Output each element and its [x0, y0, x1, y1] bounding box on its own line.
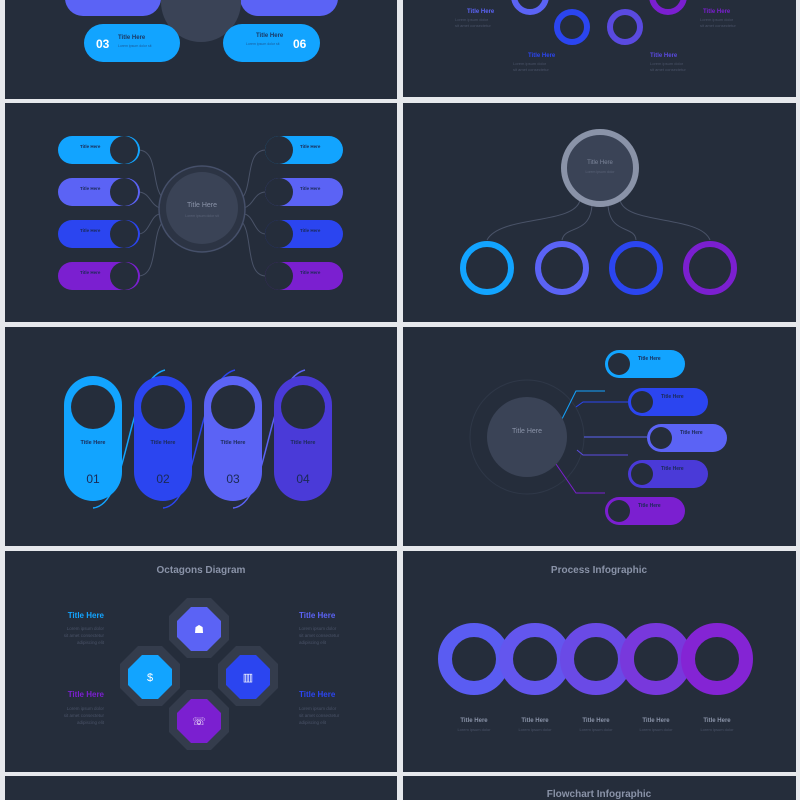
- panel: top-right circles: Lorem ipsum dolor: [513, 61, 547, 66]
- panel: numbered pills: 01: [86, 472, 100, 486]
- panel: process infographic: Title Here: [521, 718, 549, 724]
- panel: mind map pills: Title Here: [300, 144, 321, 149]
- panel: top-left hexa pills: [5, 0, 397, 99]
- panel: octagons diagram: ☏: [192, 716, 206, 728]
- panel: mind map pills: Title Here: [80, 186, 101, 191]
- panel: mind map pills: Title Here: [80, 144, 101, 149]
- panel: process infographic: Lorem ipsum dolor: [518, 727, 552, 732]
- panel: top-right circles: Title Here: [703, 9, 731, 15]
- panel: top-right circles: sit amet consectetur: [455, 23, 491, 28]
- panel: octagons diagram: Lorem ipsum dolor: [67, 706, 105, 711]
- panel: bottom-left: [5, 776, 397, 800]
- panel: process infographic: Lorem ipsum dolor: [639, 727, 673, 732]
- panel: octagons diagram: sit amet consectetur: [64, 713, 104, 718]
- panel: top-right circles: Lorem ipsum dolor: [700, 17, 734, 22]
- pill 03: Lorem ipsum dolor sit: [118, 44, 151, 48]
- panel: hierarchy circles: [403, 103, 796, 322]
- panel: numbered pills: Title Here: [151, 440, 175, 446]
- panel: process infographic: Lorem ipsum dolor: [700, 727, 734, 732]
- panel: octagons diagram: ☗: [194, 624, 204, 636]
- panel: top-right circles: Lorem ipsum dolor: [455, 17, 489, 22]
- panel: octagons diagram: $: [147, 672, 153, 684]
- panel: radial pills: Title Here: [638, 356, 661, 362]
- pill 05: [240, 0, 338, 16]
- panel: numbered pills: 03: [226, 472, 240, 486]
- panel: process infographic: Title Here: [582, 718, 610, 724]
- panel: octagons diagram: Lorem ipsum dolor: [299, 626, 337, 631]
- panel: flowchart infographic: Flowchart Infographic: [547, 789, 652, 800]
- panel: numbered pills: 04: [296, 472, 310, 486]
- center circle: Lorem ipsum dolor sit: [185, 214, 219, 218]
- panel: radial pills: Title Here: [661, 466, 684, 472]
- panel: top-right circles: Title Here: [650, 53, 678, 59]
- panel: octagons diagram: adipiscing elit: [299, 640, 327, 645]
- pill 06: [223, 24, 320, 62]
- panel: octagons diagram: Title Here: [68, 611, 105, 620]
- panel: octagons diagram: Title Here: [299, 611, 336, 620]
- panel: octagons diagram: Lorem ipsum dolor: [67, 626, 105, 631]
- panel: top-right circles: sit amet consectetur: [650, 67, 686, 72]
- panel: mind map pills: Title Here: [300, 186, 321, 191]
- panel: octagons diagram: ▥: [243, 672, 253, 684]
- pill 03: Title Here: [118, 35, 146, 41]
- pill 03: 03: [96, 37, 110, 51]
- panel: octagons diagram: Title Here: [299, 690, 336, 699]
- panel: octagons diagram: adipiscing elit: [299, 720, 327, 725]
- panel: process infographic: Title Here: [703, 718, 731, 724]
- panel: octagons diagram: adipiscing elit: [77, 720, 105, 725]
- panel: octagons diagram: [5, 551, 397, 772]
- pill 06: Lorem ipsum dolor sit: [246, 42, 279, 46]
- panel: mind map pills: Title Here: [80, 228, 101, 233]
- panel: flowchart infographic: [403, 776, 796, 800]
- panel: octagons diagram: adipiscing elit: [77, 640, 105, 645]
- panel: mind map pills: Title Here: [300, 228, 321, 233]
- panel: numbered pills: 02: [156, 472, 170, 486]
- panel: octagons diagram: sit amet consectetur: [299, 713, 340, 718]
- panel: process infographic: Lorem ipsum dolor: [579, 727, 613, 732]
- panel: radial pills: Title Here: [661, 394, 684, 400]
- panel: octagons diagram: sit amet consectetur: [299, 633, 340, 638]
- panel: process infographic: Title Here: [642, 718, 670, 724]
- panel: mind map pills: Title Here: [300, 270, 321, 275]
- panel: process infographic: Process Infographic: [551, 565, 648, 576]
- center circle: [161, 0, 241, 42]
- panel: numbered pills: [5, 327, 397, 546]
- panel: mind map pills: [5, 103, 397, 322]
- panel: top-right circles: [403, 0, 796, 97]
- ring: bulb: [557, 12, 587, 42]
- panel: process infographic: Title Here: [460, 718, 488, 724]
- panel: top-right circles: Title Here: [528, 53, 556, 59]
- panel: process infographic: Lorem ipsum dolor: [457, 727, 491, 732]
- panel: octagons diagram: Lorem ipsum dolor: [299, 706, 337, 711]
- top circle: Title Here: [587, 160, 614, 166]
- center circle: [159, 166, 245, 252]
- pill 03: [84, 24, 180, 62]
- panel: octagons diagram: sit amet consectetur: [64, 633, 104, 638]
- panel: radial pills: Title Here: [512, 428, 542, 435]
- pill 02: [65, 0, 161, 16]
- panel: process infographic: [403, 551, 796, 772]
- panel: top-right circles: Title Here: [467, 9, 495, 15]
- top circle: [564, 132, 636, 204]
- panel: numbered pills: Title Here: [81, 440, 105, 446]
- panel: radial pills: Title Here: [680, 430, 703, 436]
- pill 06: Title Here: [256, 33, 284, 39]
- panel: octagons diagram: Octagons Diagram: [157, 565, 246, 576]
- panel: top-right circles: sit amet consectetur: [700, 23, 736, 28]
- center circle: Title Here: [187, 202, 217, 209]
- panel: numbered pills: Title Here: [291, 440, 315, 446]
- panel: octagons diagram: Title Here: [68, 690, 105, 699]
- panel: top-right circles: sit amet consectetur: [513, 67, 549, 72]
- panel: numbered pills: Title Here: [221, 440, 245, 446]
- top circle: Lorem ipsum dolor: [586, 170, 615, 174]
- panel: radial pills: Title Here: [638, 503, 661, 509]
- pill 06: 06: [293, 37, 307, 51]
- panel: top-right circles: Lorem ipsum dolor: [650, 61, 684, 66]
- panel: mind map pills: Title Here: [80, 270, 101, 275]
- panel: radial pills: [403, 327, 796, 546]
- ring: user: [610, 12, 640, 42]
